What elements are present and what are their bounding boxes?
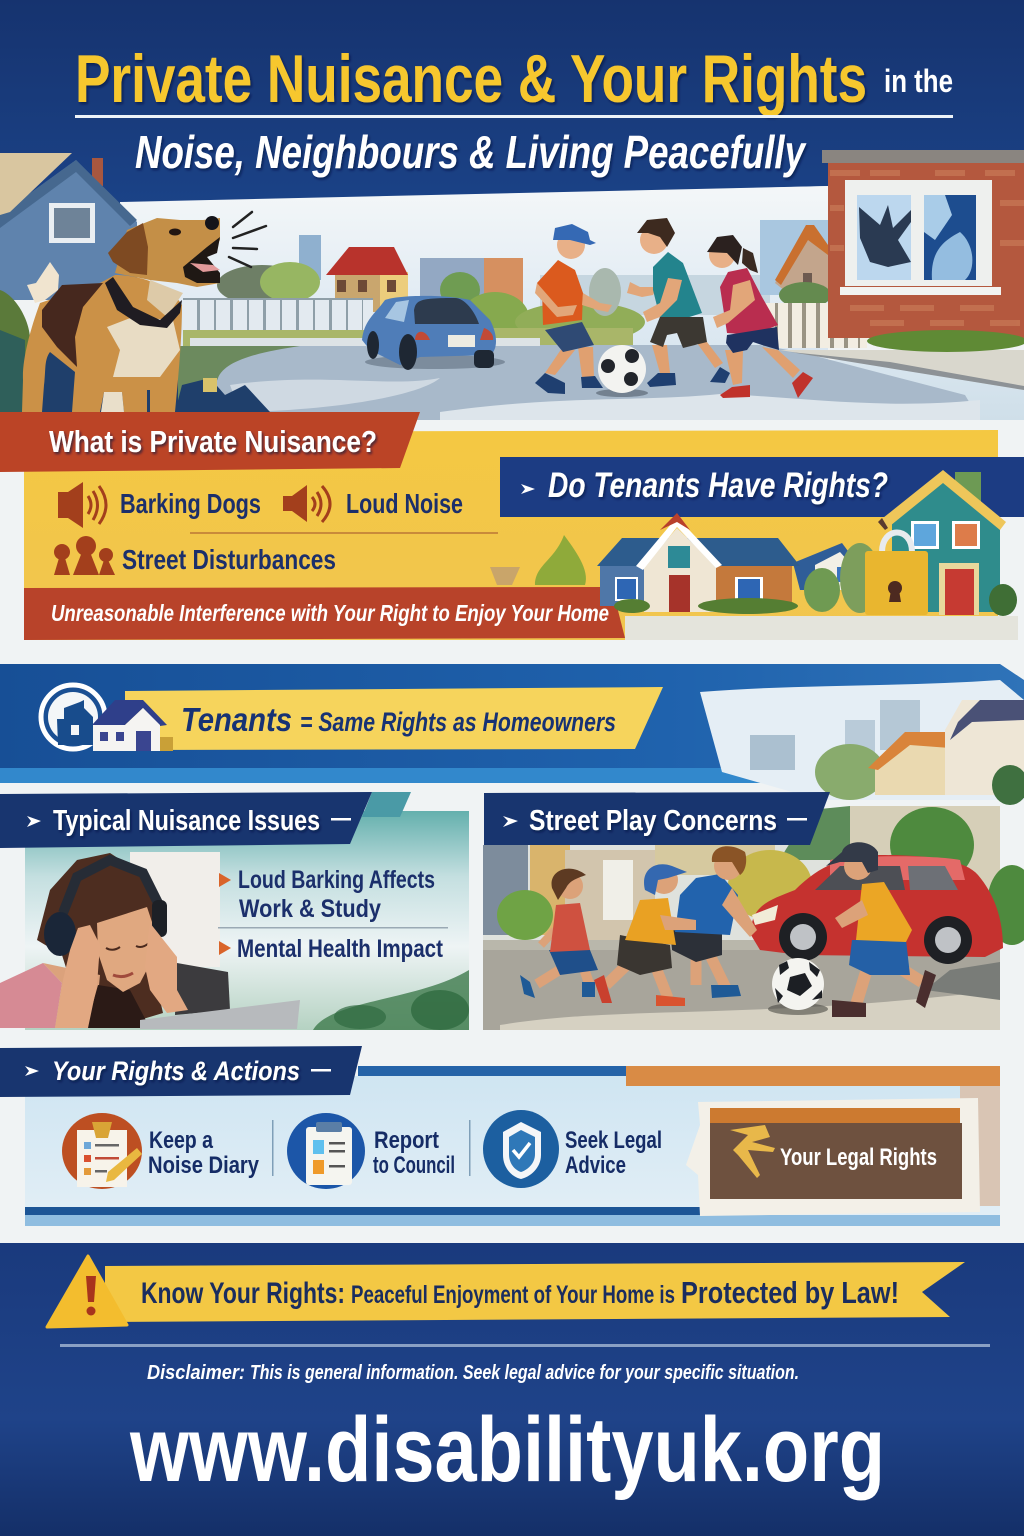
disclaimer: Disclaimer: (147, 1362, 245, 1384)
callout: know your rights ribbon (105, 1262, 965, 1322)
red car (751, 855, 1003, 964)
subtitle: Noise, Neighbours & Living Peacefully (135, 126, 807, 178)
woman with headphones (0, 853, 188, 1028)
scene background (483, 845, 1000, 1030)
curtain (130, 852, 220, 967)
bullet list (218, 866, 448, 963)
panel: typical nuisance issues (0, 792, 469, 1030)
action: keep a noise diary (62, 1113, 260, 1189)
action: report to council: to Council (373, 1152, 455, 1179)
heading banner (0, 412, 420, 472)
heading banner: Typical Nuisance Issues (53, 805, 320, 837)
small house (793, 543, 880, 613)
icon: diary (62, 1113, 142, 1189)
action: seek legal advice: Seek Legal (565, 1127, 662, 1154)
neck (43, 963, 100, 1028)
icon: shield (483, 1110, 559, 1188)
heading banner (0, 1046, 362, 1097)
distant town (183, 220, 831, 346)
pavement (780, 350, 1024, 390)
barking dog (22, 216, 220, 412)
action: keep a noise diary: Noise Diary (148, 1152, 260, 1179)
hands (55, 925, 100, 1028)
yellow banner: Tenants (181, 701, 292, 738)
definition banner (24, 587, 625, 640)
child in orange (535, 224, 612, 394)
action: report to council: Report (374, 1127, 439, 1154)
action: seek legal advice (483, 1110, 662, 1188)
main house (597, 513, 800, 614)
heading banner: Your Rights & Actions (52, 1056, 300, 1086)
town view (700, 680, 1024, 805)
footer navy background (0, 1243, 1024, 1536)
definition banner: Unreasonable Interference with Your Right to Enjoy Your Home (51, 600, 609, 626)
right brick house (822, 150, 1024, 338)
road (195, 345, 980, 420)
yellow panel (24, 430, 998, 640)
heading banner: Do Tenants Have Rights? (548, 466, 888, 505)
heading banner (0, 792, 411, 848)
child in pink with ponytail (707, 235, 813, 398)
heading banner: Street Play Concerns (529, 805, 777, 837)
panel: do tenants have rights (490, 457, 1024, 640)
panel: street play concerns (483, 792, 1024, 1030)
scene sky (120, 186, 1024, 420)
chair (175, 963, 230, 1015)
left blue house (0, 153, 137, 300)
bullet list: Loud Barking Affects (238, 866, 435, 894)
website url: www.disabilityuk.org (129, 1399, 885, 1501)
icon: key (730, 1125, 775, 1178)
hedge (867, 330, 1024, 352)
text: barking dogs: Barking Dogs (120, 488, 261, 519)
child in teal (627, 218, 730, 387)
headphones (63, 860, 160, 913)
action: keep a noise diary: Keep a (149, 1127, 214, 1154)
icon: padlock (865, 532, 928, 615)
plants (490, 535, 586, 585)
panel background (25, 1076, 1000, 1226)
heading banner: What is Private Nuisance? (49, 424, 377, 459)
callout: know your rights ribbon: Protected by Law! (681, 1275, 899, 1310)
panel: what is private nuisance (0, 412, 998, 640)
disclaimer: This is general information. Seek legal advice for your specific situation. (250, 1362, 799, 1384)
title: in the (884, 63, 953, 99)
child in red (520, 869, 598, 998)
laptop (140, 1000, 300, 1029)
panel background (25, 811, 469, 1030)
football (596, 345, 648, 397)
bullet list: Mental Health Impact (237, 935, 444, 963)
icon: speaker two (283, 485, 330, 522)
action: report to council (287, 1113, 455, 1189)
foliage left and pond (0, 290, 300, 415)
icon: people (54, 536, 115, 575)
callout: know your rights ribbon: Know Your Rights: (141, 1277, 345, 1310)
bullet list: Work & Study (239, 895, 381, 923)
top navy background (0, 0, 1024, 215)
blue band (0, 664, 1024, 783)
hair (37, 853, 163, 1028)
panel: your rights and actions (0, 1046, 1000, 1226)
yellow banner: = Same Rights as Homeowners (300, 707, 616, 737)
shirt (0, 963, 62, 1028)
icon: clipboard (287, 1113, 365, 1189)
legal rights card: Your Legal Rights (780, 1144, 937, 1171)
legal rights card (686, 1098, 980, 1216)
bark lines (229, 212, 266, 267)
heading banner (484, 792, 830, 845)
child with dark cap (826, 842, 936, 1017)
disclaimer (147, 1362, 799, 1384)
yellow banner (125, 687, 663, 750)
icon: speaker one (58, 482, 106, 528)
face (97, 907, 157, 992)
blue car (362, 296, 505, 370)
action: seek legal advice: Advice (565, 1152, 626, 1179)
text: loud noise: Loud Noise (346, 488, 463, 519)
child in yellow with cap (594, 864, 696, 1006)
picket fence (183, 298, 867, 348)
foliage (313, 970, 469, 1030)
heading banner (500, 457, 1024, 517)
hero street scene (0, 150, 1024, 420)
football (768, 958, 828, 1015)
icon: warning triangle (47, 1256, 127, 1327)
child in blue (670, 846, 757, 998)
panel: tenants equal rights band (0, 664, 1024, 805)
text: street disturbances: Street Disturbances (122, 544, 336, 575)
callout: know your rights ribbon: Peaceful Enjoyment of Your Home is (351, 1281, 675, 1309)
icon: house in circle (41, 685, 173, 751)
teal house (878, 470, 1017, 616)
